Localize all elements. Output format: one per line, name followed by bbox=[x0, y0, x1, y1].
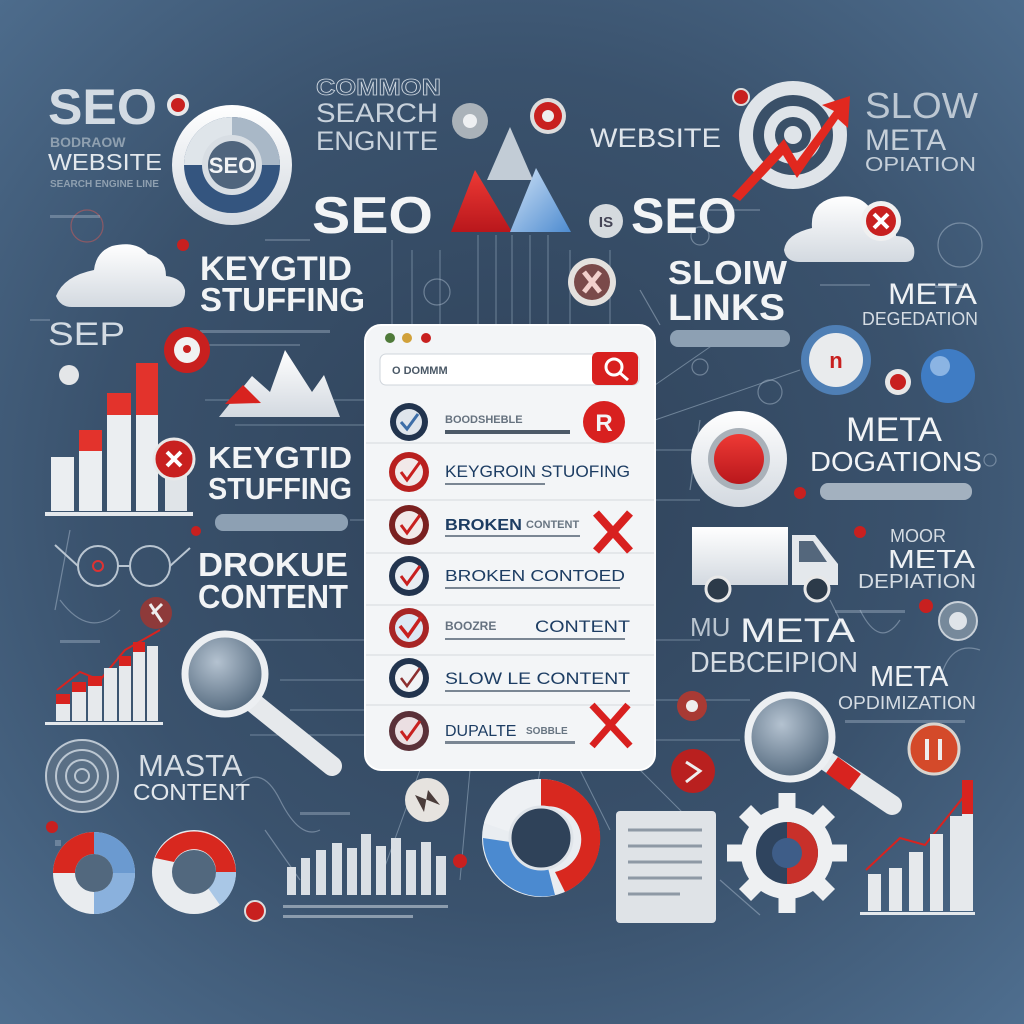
window dots bbox=[385, 333, 431, 343]
heading: meta description: META bbox=[740, 612, 855, 650]
icon: donut red-blue left bbox=[53, 832, 135, 914]
heading: moor meta deprivation: META bbox=[888, 544, 976, 574]
heading: keyword stuffing upper bbox=[200, 250, 365, 318]
heading: broken content left bbox=[198, 546, 348, 615]
icon: small red badge bbox=[140, 597, 172, 629]
heading: meta description: MU bbox=[690, 612, 730, 642]
icon: SEO target dial bbox=[172, 105, 292, 225]
icon: big red button bbox=[691, 411, 787, 507]
icon: magnifier right bbox=[748, 695, 892, 805]
icon: rising bar chart right bbox=[860, 780, 975, 915]
row 3 bbox=[389, 505, 630, 551]
icon: red heart badge bbox=[164, 327, 210, 373]
heading: slow links: SLOIW bbox=[668, 254, 788, 291]
row 2 bbox=[389, 452, 630, 492]
icon: SEO target dial: SEO bbox=[209, 153, 255, 178]
heading: meta degradation: DEGEDATION bbox=[862, 309, 978, 329]
heading: common search engine bbox=[316, 74, 441, 156]
icon: mountains bbox=[219, 350, 340, 417]
heading: meta donations: META bbox=[846, 411, 942, 449]
heading: slow meta optimisation: META bbox=[865, 124, 946, 157]
icon: grey dial right bbox=[939, 602, 977, 640]
row 4 bbox=[389, 556, 625, 596]
row 5: BOOZRE bbox=[445, 619, 496, 633]
row 7: DUPALTE bbox=[445, 723, 516, 740]
search bar: O DOMMM bbox=[392, 365, 448, 377]
small icon: red dot top right bbox=[733, 89, 749, 105]
heading: meta optimisation: META bbox=[870, 661, 949, 693]
heading: SEO centre left: SEO bbox=[312, 187, 433, 245]
heading: meta description: DEBCEIPION bbox=[690, 647, 858, 679]
row 7: SOBBLE bbox=[526, 726, 568, 737]
icon: magnifier left bbox=[185, 634, 332, 766]
heading: SEO website top left bbox=[48, 79, 162, 190]
heading: keyword stuffing upper: STUFFING bbox=[200, 281, 365, 318]
row 7 bbox=[389, 705, 630, 751]
row 3: BROKEN bbox=[445, 517, 522, 534]
row 3: CONTENT bbox=[526, 519, 579, 531]
heading: meta degradation bbox=[862, 278, 978, 329]
icon: X badge centre top bbox=[568, 258, 616, 306]
row 6: SLOW LE CONTENT bbox=[445, 669, 630, 688]
row 1: BOODSHEBLE bbox=[445, 414, 523, 426]
heading: SEO website top left: WEBSITE bbox=[48, 149, 162, 175]
row 5: CONTENT bbox=[535, 617, 630, 636]
heading: keyword stuffing lower bbox=[208, 440, 352, 531]
heading: broken content left: CONTENT bbox=[198, 578, 348, 615]
heading: meta donations: DOGATIONS bbox=[810, 446, 982, 477]
icon: grey and red badges top centre bbox=[452, 98, 566, 139]
row 1 bbox=[390, 401, 625, 443]
heading: moor meta deprivation: MOOR bbox=[890, 526, 946, 546]
heading: SEO website top left: BODRAOW bbox=[50, 134, 126, 150]
heading: SEO centre right: SEO bbox=[631, 188, 737, 244]
heading: slow links bbox=[668, 254, 790, 347]
icon: gear bbox=[727, 793, 847, 913]
heading: keyword stuffing lower: KEYGTID bbox=[208, 440, 352, 475]
heading: meta description bbox=[690, 612, 858, 679]
heading: common search engine: ENGNITE bbox=[316, 126, 438, 156]
icon: compass badge bottom bbox=[405, 778, 449, 822]
heading: broken content left: DROKUE bbox=[198, 546, 348, 583]
heading: slow links: LINKS bbox=[668, 287, 785, 328]
icon: small red dot top left bbox=[167, 94, 189, 116]
heading: slow meta optimisation: SLOW bbox=[865, 85, 978, 126]
heading: keyword stuffing lower: STUFFING bbox=[208, 471, 352, 506]
row 2: KEYGROIN STUOFING bbox=[445, 462, 630, 481]
icon: mini bar chart bbox=[45, 630, 163, 725]
row 6 bbox=[389, 658, 630, 698]
heading: meta degradation: META bbox=[888, 278, 977, 311]
icon: cloud left bbox=[56, 244, 185, 307]
icon: bar chart left bbox=[45, 363, 194, 516]
panel: browser checklist bbox=[365, 325, 655, 770]
icon: triangle logo bbox=[451, 127, 571, 232]
heading: masta content: MASTA bbox=[138, 748, 243, 783]
icon: fingerprint disc bbox=[46, 740, 118, 812]
heading: slow meta optimisation bbox=[865, 85, 978, 176]
icon: cloud with red cross bbox=[784, 196, 914, 262]
heading: keyword stuffing upper: KEYGTID bbox=[200, 250, 352, 288]
icon: target with rising red arrow bbox=[732, 81, 850, 201]
row 4: BROKEN CONTOED bbox=[445, 568, 625, 585]
icon: delivery truck bbox=[692, 527, 838, 601]
heading: masta content: CONTENT bbox=[133, 779, 250, 805]
heading: SEP: SEP bbox=[48, 316, 125, 352]
icon: large donut chart bbox=[482, 779, 600, 897]
icon: document card bbox=[616, 811, 716, 923]
icon: right badges row: n bbox=[829, 348, 843, 373]
heading: website: WEBSITE bbox=[590, 123, 721, 153]
heading: common search engine: COMMON bbox=[316, 74, 441, 100]
search bar bbox=[380, 352, 639, 385]
icon: glasses sketch bbox=[55, 545, 190, 586]
heading: SEO centre right: IS bbox=[599, 214, 613, 231]
heading: SEO website top left: SEARCH ENGINE LINE bbox=[50, 179, 159, 190]
heading: slow meta optimisation: OPIATION bbox=[865, 154, 976, 176]
heading: SEO website top left: SEO bbox=[48, 79, 157, 135]
icon: donut red-white bbox=[152, 830, 236, 914]
heading: meta optimisation: OPDIMIZATION bbox=[838, 693, 976, 713]
icon: right badges row bbox=[801, 325, 975, 403]
heading: meta donations bbox=[810, 411, 982, 500]
icon: red small dots bottom left bbox=[46, 239, 467, 921]
heading: moor meta deprivation bbox=[858, 526, 976, 593]
icon: red badges near magnifier right bbox=[671, 691, 959, 793]
heading: meta optimisation bbox=[838, 661, 976, 713]
heading: common search engine: SEARCH bbox=[316, 98, 438, 128]
row 1: R bbox=[595, 410, 613, 437]
small red dots right bbox=[794, 487, 933, 613]
row 5 bbox=[389, 608, 630, 648]
heading: masta content bbox=[133, 748, 250, 805]
heading: moor meta deprivation: DEPIATION bbox=[858, 571, 976, 593]
icon: bottom bar chart bbox=[283, 834, 448, 918]
